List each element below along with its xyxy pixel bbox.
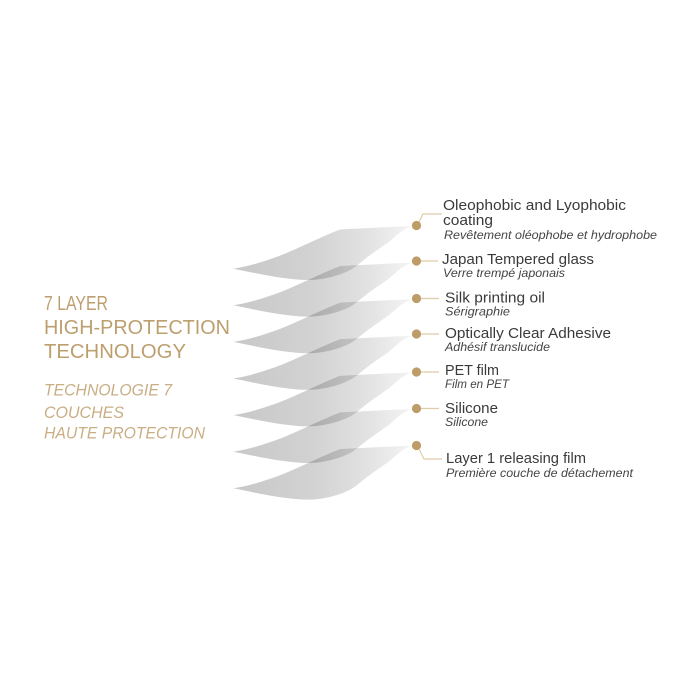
callout: oleophobic coating: Revêtement oléophobe et hydrophobe <box>444 230 657 242</box>
callout: optically clear adhesive <box>412 325 611 354</box>
callout: PET film: PET film <box>445 362 499 379</box>
callout: PET film <box>412 362 510 391</box>
callout: silk printing oil: Sérigraphie <box>445 306 510 318</box>
callout: Japan tempered glass <box>412 251 594 280</box>
heading: French translation: HAUTE PROTECTION <box>44 424 206 442</box>
callout: oleophobic coating: Oleophobic and Lyophobic <box>443 197 627 214</box>
callout: oleophobic coating: coating <box>443 212 493 229</box>
callout: Japan tempered glass: Japan Tempered glass <box>442 251 594 268</box>
layer stack illustration <box>234 226 412 500</box>
heading: 7 layer high-protection technology: HIGH-PROTECTION <box>44 317 230 339</box>
callout: PET film: Film en PET <box>445 379 510 391</box>
callout: oleophobic coating <box>412 197 657 242</box>
heading: French translation: TECHNOLOGIE 7 <box>44 380 173 400</box>
heading: French translation <box>44 380 206 442</box>
callout: silicone: Silicone <box>445 400 498 417</box>
heading: French translation: COUCHES <box>44 403 125 422</box>
callout: silk printing oil <box>412 290 545 318</box>
callout: layer 1 releasing film: Layer 1 releasing film <box>446 450 586 467</box>
callout: optically clear adhesive: Optically Clear Adhesive <box>445 325 611 342</box>
callout: layer 1 releasing film <box>412 441 634 480</box>
callout: Japan tempered glass: Verre trempé japonais <box>443 268 565 280</box>
callout: silk printing oil: Silk printing oil <box>445 290 545 306</box>
callout: silicone <box>412 400 498 429</box>
callout: layer 1 releasing film: Première couche de détachement <box>446 468 634 480</box>
heading: 7 layer high-protection technology <box>44 293 230 363</box>
callout: silicone: Silicone <box>445 417 488 429</box>
callout: optically clear adhesive: Adhésif translucide <box>444 342 550 354</box>
heading: 7 layer high-protection technology: 7 LAYER <box>44 293 108 315</box>
heading: 7 layer high-protection technology: TECHNOLOGY <box>44 341 186 363</box>
